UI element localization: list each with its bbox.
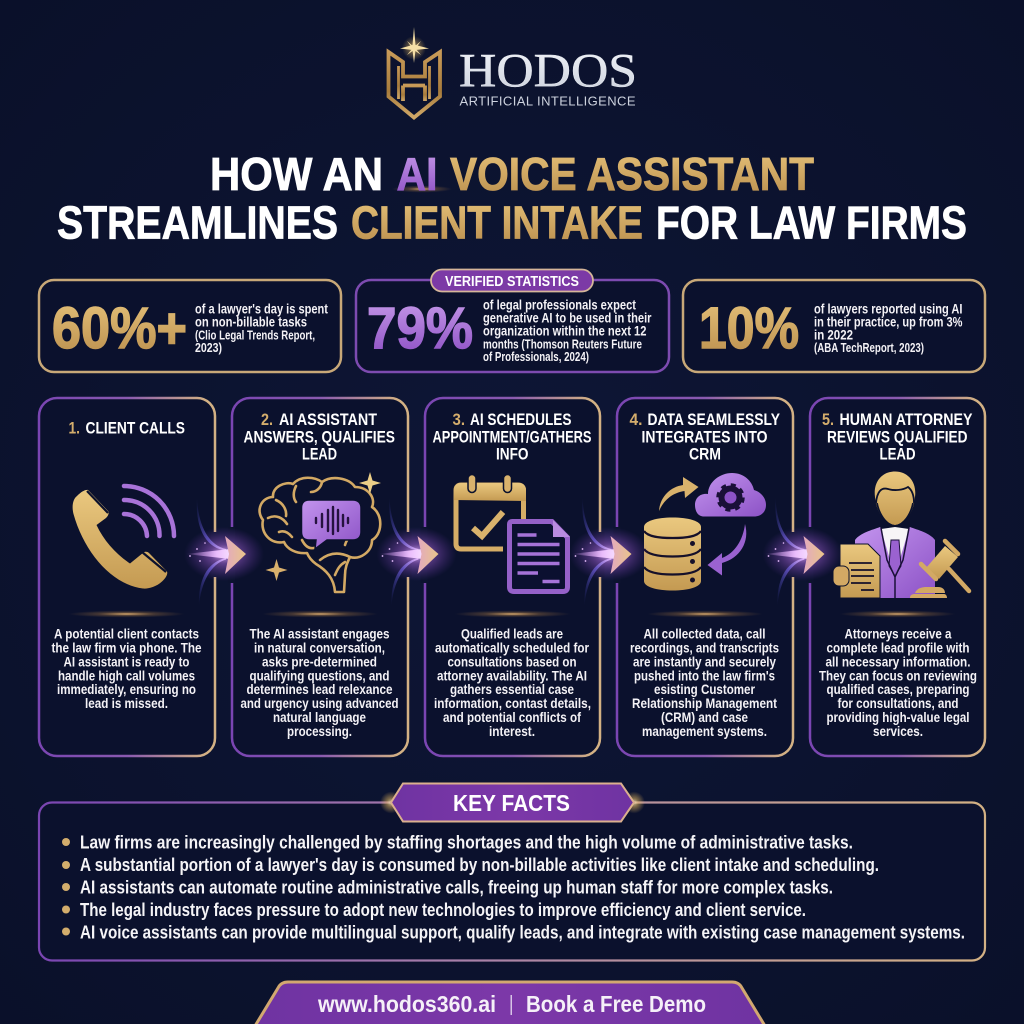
step 5 heading: LEAD [880, 444, 916, 464]
step 5 description: They can focus on reviewing [819, 668, 977, 684]
badge: key facts [380, 784, 645, 822]
step 4 heading: INTEGRATES INTO [642, 428, 768, 446]
step 4 heading: DATA SEAMLESSLY [648, 410, 780, 429]
panel: stat 10%: of lawyers reported using AI [814, 302, 962, 316]
panel: step 5 attorney [810, 398, 985, 756]
icon: database, cloud and arrows [644, 473, 766, 590]
step 1 description [52, 626, 202, 711]
step 4 description: All collected data, call [644, 626, 766, 642]
step 4 description [630, 626, 779, 739]
step 2 heading [244, 410, 395, 464]
bullet list [62, 832, 965, 942]
glow under icon [647, 610, 763, 618]
arrow: step 1 to 2 [184, 497, 264, 606]
bullet list: Law firms are increasingly challenged by staffing shortages and the high volume of administrative tasks. [80, 832, 853, 852]
step 5 description [819, 626, 977, 739]
panel: stat 60%: of a lawyer's day is spent [195, 302, 328, 316]
title: STREAMLINES [57, 196, 338, 248]
step 3 description: interest. [489, 723, 535, 739]
arrow: step 2 to 3 [376, 497, 456, 606]
step 3 heading: AI SCHEDULES [470, 410, 572, 429]
step 4 description: recordings, and transcripts [630, 640, 779, 656]
panel: key facts [39, 784, 985, 960]
step 4 description: management systems. [642, 723, 767, 739]
step 2 description: and urgency using advanced [240, 695, 398, 711]
step 5 description: for consultations, and [838, 695, 958, 711]
step 3 description: consultations based on [448, 654, 576, 670]
step 2 description: The AI assistant engages [250, 626, 390, 642]
panel: stat 10% [683, 280, 985, 372]
step 5 description: complete lead profile with [826, 640, 970, 656]
arrow: step 3 to 4 [570, 497, 650, 606]
title: HOW AN [210, 148, 383, 200]
step 5 description: Attorneys receive a [844, 626, 952, 642]
title: AI [396, 148, 438, 200]
panel: stat 79%: organization within the next 12 [483, 324, 646, 338]
step 3 description: attorney availability. The AI [437, 668, 587, 684]
step 2 heading: 2. [261, 410, 273, 429]
step 5 heading: 5. [822, 410, 834, 429]
step 3 description: Qualified leads are [461, 626, 563, 642]
panel: stat 79%: of Professionals, 2024) [483, 350, 589, 364]
step 3 heading: APPOINTMENT/GATHERS [432, 428, 592, 446]
step 4 description: pushed into the law firm's [634, 668, 775, 684]
panel: stat 79%: generative AI to be used in their [483, 310, 652, 326]
step 3 description: automatically scheduled for [435, 640, 589, 656]
footer banner: Book a Free Demo [526, 991, 706, 1017]
step 3 description [434, 626, 591, 739]
panel: stat 10%: in their practice, up from 3% [814, 314, 962, 330]
title: FOR LAW FIRMS [656, 196, 967, 248]
step 5 description: qualified cases, preparing [826, 681, 970, 697]
step 1 heading: 1. [68, 418, 80, 438]
step 5 heading: HUMAN ATTORNEY [840, 410, 972, 429]
step 5 description: services. [873, 723, 923, 739]
badge: verified statistics [431, 270, 593, 292]
panel: stat 79%: of legal professionals expect [483, 298, 636, 312]
panel: stat 60%: (Clio Legal Trends Report, [195, 328, 315, 342]
bullet list: AI assistants can automate routine administrative calls, freeing up human staff for more complex tasks. [80, 878, 833, 898]
step 1 description: immediately, ensuring no [57, 681, 196, 697]
panel: stat 60% [39, 280, 341, 372]
panel: step 4 CRM [617, 398, 793, 756]
step 4 description: are instantly and securely [633, 654, 776, 670]
step 3 heading: INFO [496, 444, 528, 464]
step 5 heading: REVIEWS QUALIFIED [827, 428, 968, 446]
badge: verified statistics: VERIFIED STATISTICS [445, 274, 579, 290]
panel: stat 79%: months (Thomson Reuters Future [483, 338, 642, 352]
icon: logo star [400, 27, 429, 63]
step 4 description: Relationship Management [632, 695, 777, 711]
step 2 description: asks pre-determined [262, 654, 377, 670]
step 1 description: lead is missed. [85, 695, 168, 711]
bullet list: A substantial portion of a lawyer's day is consumed by non-billable activities like client intake and scheduling. [80, 855, 879, 875]
step 2 description: determines lead relexance [246, 681, 393, 697]
panel: step 1 client calls [39, 398, 215, 756]
step 2 description: in natural conversation, [254, 640, 385, 656]
step 1 heading: CLIENT CALLS [86, 418, 185, 438]
step 3 heading: 3. [452, 410, 465, 429]
step 1 description: AI assistant is ready to [64, 654, 190, 670]
step 2 heading: AI ASSISTANT [279, 410, 378, 429]
step 2 description [240, 626, 398, 739]
step 3 description: and potential conflicts of [443, 709, 581, 725]
step 1 description: A potential client contacts [54, 626, 199, 642]
panel: step 3 schedules [425, 398, 600, 756]
step 5 description: providing high-value legal [826, 709, 970, 725]
arrow: step 4 to 5 [762, 497, 842, 606]
bullet list: The legal industry faces pressure to adopt new technologies to improve efficiency and client service. [80, 900, 806, 920]
step 4 description: (CRM) and case [661, 709, 748, 725]
step 5 description: all necessary information. [826, 654, 970, 670]
icon: shield with H monogram [388, 52, 440, 118]
step 2 heading: ANSWERS, QUALIFIES [244, 428, 395, 446]
badge: key facts: KEY FACTS [453, 790, 570, 816]
glow under icon [262, 610, 378, 618]
glow under icon [840, 610, 956, 618]
step 5 heading [822, 410, 972, 464]
step 4 description: esisting Customer [654, 681, 755, 697]
step 2 description: qualifying questions, and [250, 668, 390, 684]
title [57, 148, 967, 248]
title: VOICE ASSISTANT [450, 148, 814, 200]
panel: stat 79% [356, 280, 669, 372]
icon: attorney with document and gavel [833, 472, 969, 598]
panel: stat 60%: 60%+ [52, 296, 187, 361]
glow under icon [68, 610, 184, 618]
logo [388, 27, 637, 118]
panel: stat 79%: 79% [367, 296, 473, 361]
step 4 heading: 4. [630, 410, 642, 429]
step 1 description: the law firm via phone. The [52, 640, 202, 656]
panel: step 2 AI assistant [232, 398, 408, 756]
icon: brain with speech bubble [260, 472, 381, 592]
step 4 heading: CRM [689, 444, 721, 464]
icon: calendar and document [454, 474, 570, 592]
panel: stat 10%: (ABA TechReport, 2023) [814, 341, 924, 355]
panel: stat 10%: in 2022 [814, 328, 853, 342]
footer banner: www.hodos360.ai [317, 991, 496, 1017]
step 2 description: natural language [273, 709, 366, 725]
step 2 heading: LEAD [302, 444, 337, 464]
footer banner [255, 982, 765, 1024]
panel: stat 60%: 2023) [195, 341, 222, 355]
glow under icon [454, 610, 570, 618]
panel: stat 60%: on non-billable tasks [195, 314, 307, 330]
brand tagline: ARTIFICIAL INTELLIGENCE [460, 94, 636, 108]
brand name: HODOS [459, 44, 637, 98]
step 2 description: processing. [287, 723, 352, 739]
step 3 heading [432, 410, 592, 464]
step 3 description: information, contast details, [434, 695, 591, 711]
step 3 description: gathers essential case [450, 681, 574, 697]
title: CLIENT INTAKE [351, 196, 643, 248]
step 4 heading [630, 410, 780, 464]
panel: stat 10%: 10% [699, 296, 799, 361]
icon: phone [73, 486, 174, 589]
step 1 description: handle high call volumes [58, 668, 195, 684]
